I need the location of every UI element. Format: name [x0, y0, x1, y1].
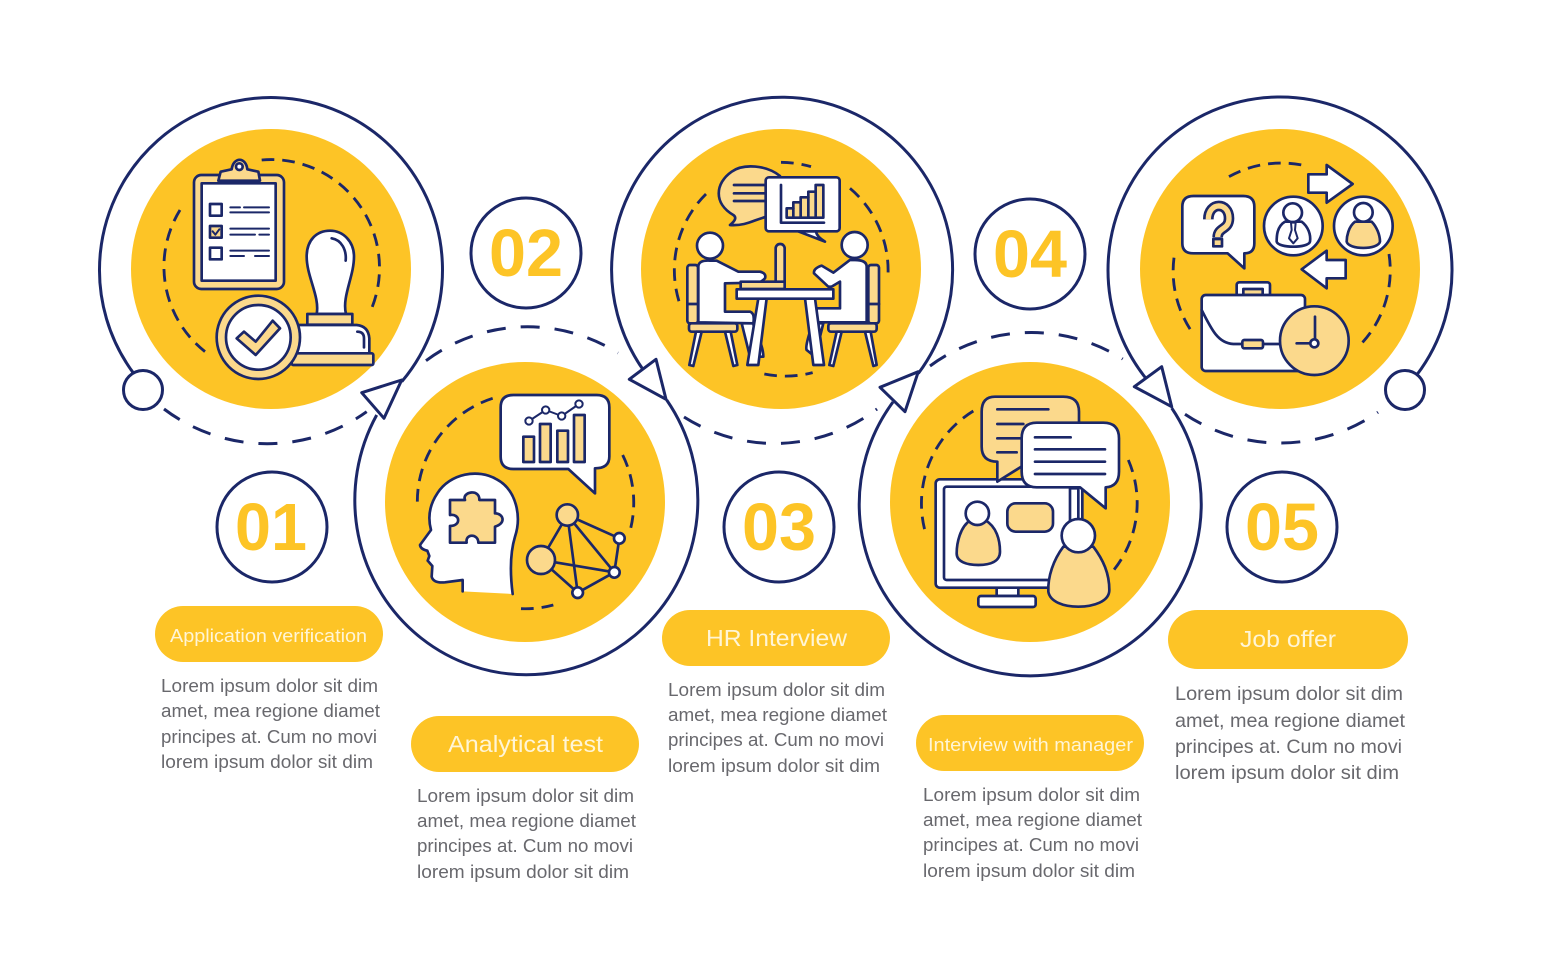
number badge 03: 03: [742, 490, 816, 565]
text block: step 05 description: amet, mea regione diamet: [1175, 710, 1406, 732]
label pill: job offer: [1168, 610, 1408, 669]
number badge 05: [1227, 472, 1337, 582]
ring: step 01 outline: [99, 98, 442, 444]
icon: clipboard, seal and stamp: [164, 160, 380, 379]
text block: step 01 description: lorem ipsum dolor sit dim: [161, 751, 373, 772]
yellow disc: step 04: [890, 362, 1170, 642]
text block: step 01 description: Lorem ipsum dolor sit dim: [161, 675, 378, 696]
number badge 03: [724, 472, 834, 582]
arrow: step 01 to step 02: [362, 380, 402, 418]
panel: step 01 application verification: [99, 98, 442, 772]
panel: step 03 HR interview: [612, 97, 953, 776]
ring: step 02 outline: [355, 327, 698, 675]
panel: step 05 job offer: [1108, 97, 1452, 784]
yellow disc: step 03: [641, 129, 921, 409]
text block: step 01 description: principes at. Cum no movi: [161, 726, 377, 747]
text block: step 03 description: amet, mea regione diamet: [668, 704, 887, 725]
start node: [124, 370, 162, 410]
text block: step 03 description: lorem ipsum dolor sit dim: [668, 755, 880, 776]
label pill: analytical test: Analytical test: [448, 731, 604, 757]
icon: video call with speech bubbles: [921, 397, 1137, 607]
number badge 04: [975, 199, 1085, 309]
number badge 02: 02: [489, 216, 563, 291]
label pill: interview with manager: Interview with manager: [928, 734, 1133, 755]
text block: step 02 description: amet, mea regione diamet: [417, 810, 636, 831]
number badge 04: 04: [993, 217, 1067, 292]
ring: step 04 outline: [859, 333, 1201, 676]
label pill: analytical test: [411, 716, 639, 772]
text block: step 01 description: amet, mea regione diamet: [161, 700, 380, 721]
label pill: interview with manager: [916, 715, 1144, 771]
label pill: HR interview: HR Interview: [706, 625, 847, 651]
number badge 02: [471, 198, 581, 308]
icon: two people at a table with speech bubbles: [674, 162, 888, 376]
text block: step 05 description: Lorem ipsum dolor sit dim: [1175, 683, 1403, 705]
icon: head with puzzle, chart bubble and network: [417, 395, 634, 609]
label pill: HR interview: [662, 610, 890, 666]
yellow disc: step 01: [131, 129, 411, 409]
text block: step 02 description: principes at. Cum no movi: [417, 835, 633, 856]
label pill: application verification: Application verification: [170, 625, 367, 646]
label pill: application verification: [155, 606, 383, 662]
arrow: step 02 to step 03: [629, 359, 666, 399]
panel: step 04 interview with manager: [859, 199, 1201, 881]
text block: step 02 description: Lorem ipsum dolor sit dim: [417, 785, 634, 806]
yellow disc: step 02: [385, 362, 665, 642]
ring: step 03 outline: [612, 97, 953, 443]
text block: step 04 description: principes at. Cum no movi: [923, 834, 1139, 855]
text block: step 04 description: lorem ipsum dolor sit dim: [923, 860, 1135, 881]
text block: step 02 description: lorem ipsum dolor sit dim: [417, 861, 629, 882]
text block: step 04 description: amet, mea regione diamet: [923, 809, 1142, 830]
text block: step 05 description: lorem ipsum dolor sit dim: [1175, 762, 1399, 784]
text block: step 05 description: principes at. Cum no movi: [1175, 736, 1402, 758]
number badge 05: 05: [1245, 490, 1319, 565]
end node: [1386, 370, 1424, 410]
number badge 01: 01: [235, 490, 307, 565]
ring: step 05 outline: [1108, 97, 1452, 443]
panel: step 02 analytical test: [355, 198, 698, 882]
number badge 01: [217, 472, 327, 582]
text block: step 03 description: principes at. Cum no movi: [668, 729, 884, 750]
yellow disc: step 05: [1140, 129, 1420, 409]
arrow: step 04 to step 05: [1134, 367, 1172, 407]
icon: question bubble, candidates, briefcase and clock: [1173, 163, 1393, 375]
text block: step 03 description: Lorem ipsum dolor sit dim: [668, 679, 885, 700]
label pill: job offer: Job offer: [1240, 626, 1336, 652]
text block: step 04 description: Lorem ipsum dolor sit dim: [923, 784, 1140, 805]
arrow: step 03 to step 04: [880, 372, 918, 412]
